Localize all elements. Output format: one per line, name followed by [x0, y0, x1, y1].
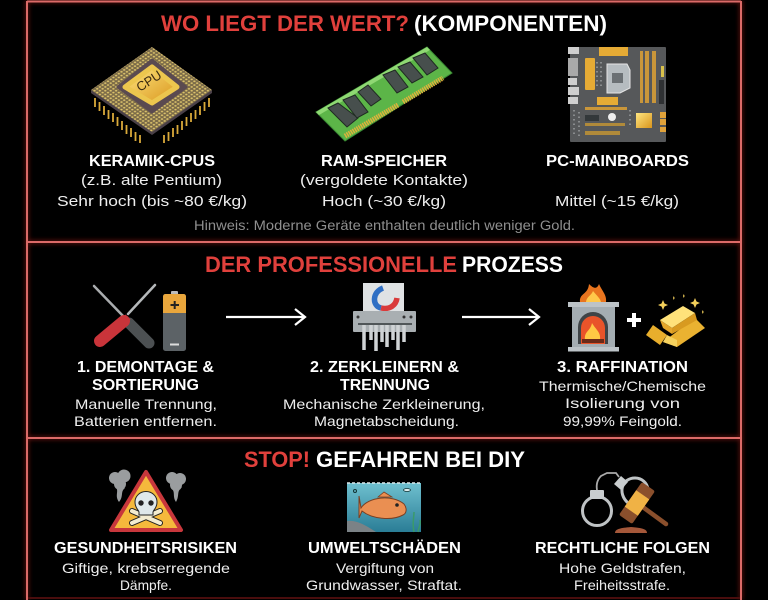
- heading: Stop Gefahren bei DIY: STOP!: [244, 447, 310, 472]
- text: PC-Mainboards: Mittel (~15 €/kg): [555, 193, 679, 210]
- icon: mainboard: [568, 47, 666, 142]
- text: Rechtliche Folgen: [535, 540, 710, 593]
- icon: ceramic CPU: CPU: [133, 67, 164, 95]
- text: RAM-Speicher: RAM-SPEICHER: [321, 153, 447, 170]
- text: step 3: 99,99% Feingold.: [563, 413, 682, 429]
- text: step 3: Isolierung von: [565, 395, 680, 411]
- text: Gesundheitsrisiken: GESUNDHEITSRISIKEN: [54, 540, 237, 557]
- text: Umweltschäden: UMWELTSCHÄDEN: [308, 540, 461, 557]
- heading: Der professionelle Prozess: DER PROFESSIONELLE: [205, 252, 457, 277]
- text: Umweltschäden: Grundwasser, Straftat.: [306, 577, 462, 593]
- panel: Gefahren: [54, 447, 710, 593]
- text: Keramik-CPUs: Sehr hoch (bis ~80 €/kg): [57, 193, 247, 210]
- text: RAM-Speicher: (vergoldete Kontakte): [300, 172, 468, 189]
- icon: plus: [627, 313, 641, 327]
- panel: Komponenten: [57, 11, 689, 233]
- text: step 1: 1. DEMONTAGE &: [77, 359, 214, 376]
- icon: RAM module: [316, 47, 452, 141]
- arrow: step 1 to 2: [226, 309, 305, 325]
- text: RAM-Speicher: Hoch (~30 €/kg): [322, 193, 446, 210]
- heading: Wo liegt der Wert: (KOMPONENTEN): [414, 11, 607, 36]
- heading: Wo liegt der Wert: WO LIEGT DER WERT?: [161, 11, 409, 36]
- text: step 1: Batterien entfernen.: [74, 413, 217, 429]
- text: Rechtliche Folgen: RECHTLICHE FOLGEN: [535, 540, 710, 557]
- arrow: step 2 to 3: [462, 309, 539, 325]
- text: Rechtliche Folgen: Hohe Geldstrafen,: [559, 560, 686, 576]
- text: Keramik-CPUs: KERAMIK-CPUS: [89, 153, 215, 170]
- icon: furnace: [568, 284, 619, 352]
- heading: Stop Gefahren bei DIY: GEFAHREN BEI DIY: [316, 447, 525, 472]
- text: RAM-Speicher: [300, 153, 468, 210]
- icon: gold bars: [646, 294, 705, 347]
- text: step 2: [283, 359, 485, 429]
- text: Umweltschäden: [306, 540, 462, 593]
- text: Keramik-CPUs: [57, 153, 247, 210]
- icon: screwdrivers and battery: [94, 285, 186, 351]
- text: step 1: SORTIERUNG: [92, 377, 199, 394]
- panel: Prozess: [74, 252, 706, 429]
- text: step 2: TRENNUNG: [340, 377, 430, 394]
- text: step 1: Manuelle Trennung,: [75, 396, 217, 412]
- text: step 2: Mechanische Zerkleinerung,: [283, 396, 485, 412]
- text: Gesundheitsrisiken: Giftige, krebserregende: [62, 560, 230, 576]
- text: Gesundheitsrisiken: [54, 540, 237, 593]
- text: step 2: Magnetabscheidung.: [314, 413, 459, 429]
- text: step 3: Thermische/Chemische: [539, 378, 706, 394]
- text: step 1: [74, 359, 217, 429]
- text: PC-Mainboards: PC-MAINBOARDS: [546, 153, 689, 170]
- heading: Der professionelle Prozess: PROZESS: [462, 252, 563, 277]
- icon: handcuffs and gavel: [582, 473, 666, 533]
- text: step 3: [539, 359, 706, 429]
- text: Umweltschäden: Vergiftung von: [336, 560, 434, 576]
- icon: polluted water with fish: [347, 483, 421, 532]
- icon: warning triangle with skull: [109, 470, 186, 530]
- heading: Wo liegt der Wert: [161, 11, 607, 36]
- text: step 3: 3. RAFFINATION: [557, 359, 688, 376]
- icon: shredder with magnet: [353, 283, 416, 351]
- text: PC-Mainboards: [546, 153, 689, 210]
- text: Rechtliche Folgen: Freiheitsstrafe.: [574, 577, 670, 593]
- note: Hinweis: Hinweis: Moderne Geräte enthalten deutlich weniger Gold.: [194, 218, 575, 233]
- text: Gesundheitsrisiken: Dämpfe.: [120, 577, 172, 593]
- text: step 2: 2. ZERKLEINERN &: [310, 359, 459, 376]
- icon: ceramic CPU: [91, 47, 212, 143]
- text: Keramik-CPUs: (z.B. alte Pentium): [81, 172, 222, 189]
